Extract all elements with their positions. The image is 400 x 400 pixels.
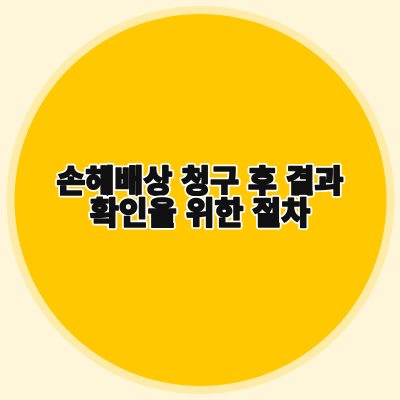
title line 2: 확인을 위한 절차 bbox=[90, 195, 310, 231]
title line 1: 손해배상 청구 후 결과 bbox=[56, 163, 344, 199]
title line 2: 확인을 위한 절차 bbox=[90, 195, 310, 231]
title line 1: 손해배상 청구 후 결과 bbox=[56, 163, 344, 199]
title bbox=[56, 163, 344, 231]
